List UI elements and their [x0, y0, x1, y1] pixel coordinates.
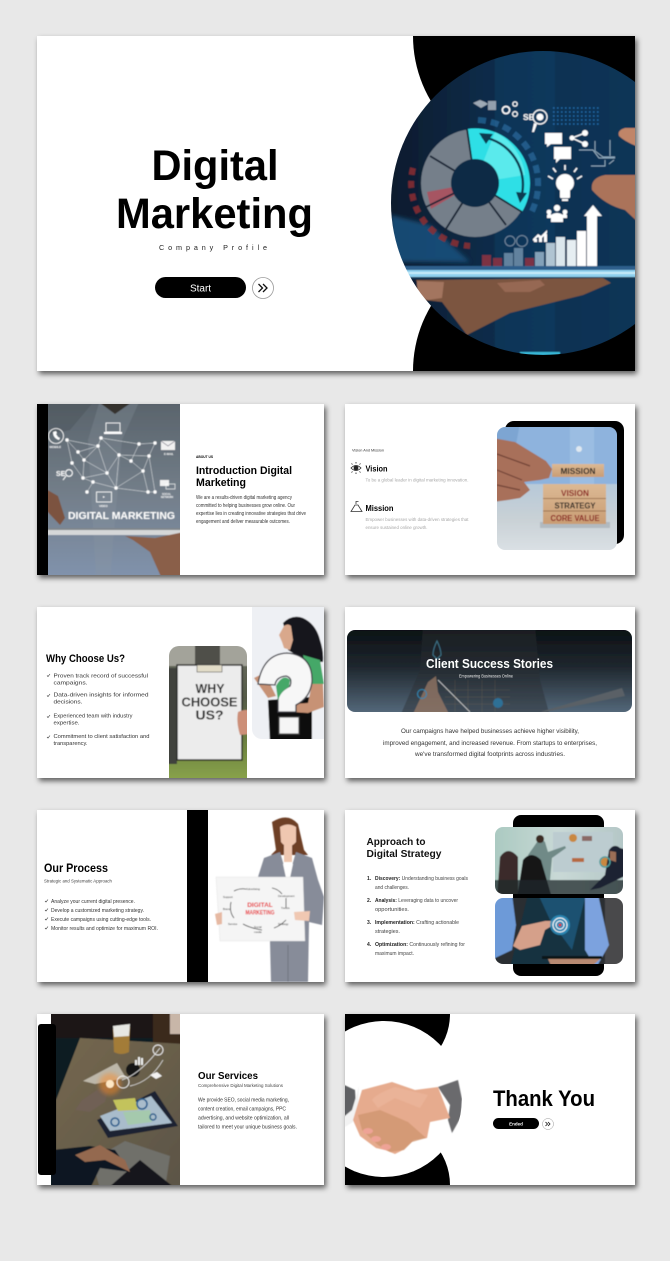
- heading: Digital Strategy: [366, 849, 442, 860]
- numbered list: opportunities.: [375, 907, 409, 913]
- checklist: Develop a customized marketing strategy.: [51, 908, 144, 914]
- checklist: Execute campaigns using cutting-edge tools.: [51, 917, 151, 923]
- body text: committed to helping businesses grow online. Our: [196, 503, 295, 509]
- photo: digital marketing network: NETWORK: [161, 496, 174, 499]
- heading: Marketing: [196, 477, 246, 489]
- numbered list: 3.: [367, 920, 372, 926]
- banner title: Client Success Stories: [426, 657, 553, 671]
- photo: wooden blocks: MISSION: [560, 467, 596, 476]
- panel: introduction slide: [37, 400, 324, 579]
- arrow button: [542, 1118, 554, 1130]
- photo: woman holding digital marketing board: Brand: [223, 907, 231, 911]
- checklist: campaigns.: [54, 680, 88, 686]
- banner image: [347, 630, 632, 712]
- numbered list: 1.: [367, 876, 372, 882]
- photo: handshake: [345, 1021, 462, 1177]
- body text: We are a results-driven digital marketing agency: [196, 495, 292, 501]
- vision heading: Vision: [366, 464, 388, 474]
- numbered list: Optimization: Continuously refining for: [375, 942, 465, 948]
- numbered list: Implementation: Crafting actionable: [375, 920, 459, 926]
- growth bars and arrow: [535, 205, 602, 266]
- checklist: Monitor results and optimize for maximum ROI.: [51, 926, 158, 932]
- black corner arcs: [345, 1014, 450, 1185]
- black backing shape: [513, 815, 604, 976]
- vision text: To be a global leader in digital marketing innovation.: [366, 478, 468, 482]
- photo: team presentation: [495, 827, 623, 894]
- checklist: Proven track record of successful: [54, 674, 148, 680]
- panel: hero slide: [35, 35, 641, 378]
- heading: [196, 465, 292, 489]
- photo: woman holding digital marketing board: DIGITAL: [247, 902, 273, 909]
- photo: why choose us clipboard: [169, 646, 247, 778]
- heading: Why Choose Us?: [46, 653, 125, 665]
- heading: Our Services: [198, 1070, 258, 1082]
- panel: vision and mission slide: [345, 404, 635, 575]
- label: vision and mission: Vision And Mission: [352, 448, 384, 452]
- arrow button: [252, 278, 274, 298]
- numbered list: [367, 876, 468, 957]
- photo: digital marketing network: SE: [56, 471, 66, 478]
- panel: our services slide: [37, 1010, 324, 1189]
- photo: digital marketing network: [44, 400, 184, 579]
- label: about us: ABOUT US: [196, 454, 213, 459]
- photo: woman holding digital marketing board: Trends: [281, 906, 290, 910]
- icon: mountain flag: [351, 502, 362, 512]
- panel: approach to digital strategy slide: [345, 810, 635, 982]
- panel: thank you slide: [343, 1013, 641, 1192]
- photo: woman holding digital marketing board: Support: [223, 895, 233, 899]
- photo: why choose us clipboard: US?: [196, 708, 224, 722]
- checklist: decisions.: [54, 700, 82, 706]
- photo: woman holding digital marketing board: media: [254, 930, 262, 934]
- heading: Thank You: [493, 1086, 595, 1111]
- photo: hand holding tablet with digital marketing icons: [385, 45, 641, 361]
- photo: why choose us clipboard: CHOOSE: [182, 696, 238, 710]
- start button: [155, 277, 246, 298]
- title: Digital: [152, 142, 278, 190]
- body text: advertising, and website optimization, all: [198, 1116, 289, 1122]
- body text: engagement and deliver measurable outcomes.: [196, 519, 290, 525]
- photo: wooden blocks: CORE VALUE: [550, 514, 600, 523]
- photo: woman holding digital marketing board: [215, 817, 324, 982]
- numbered list: and challenges.: [375, 885, 409, 891]
- mission text: [366, 517, 469, 530]
- heading: [366, 837, 442, 860]
- segmented ring: [478, 120, 538, 215]
- numbered list: 4.: [367, 942, 372, 948]
- banner subtitle: Empowering Businesses Online: [459, 674, 513, 678]
- photo: wooden blocks: STRATEGY: [554, 502, 596, 510]
- checklist: Data-driven insights for informed: [54, 692, 149, 698]
- dotted grid and circuit lines: [553, 108, 601, 124]
- body text: expertise lies in creating innovative strategies that drive: [196, 511, 306, 517]
- body text: Our campaigns have helped businesses achieve higher visibility,: [401, 729, 579, 735]
- photo: wooden blocks: [497, 427, 617, 550]
- body text: we've transformed digital footprints across industries.: [414, 752, 565, 758]
- photo: digital marketing network: MOBILE: [50, 445, 61, 449]
- numbered list: maximum impact.: [375, 951, 414, 957]
- photo: hands on phone with icons over desk: [51, 1014, 180, 1185]
- subheading: Comprehensive Digital Marketing Solutions: [198, 1083, 284, 1088]
- ended button: [493, 1118, 539, 1129]
- hand under tablet: [416, 278, 611, 335]
- heading: Our Process: [44, 863, 108, 875]
- checklist: Experienced team with industry: [54, 714, 133, 720]
- body text: improved engagement, and increased revenue. From startups to enterprises,: [383, 741, 597, 747]
- photo: digital marketing network: SOCIAL: [162, 493, 172, 496]
- black rounded strip: [38, 1024, 56, 1175]
- black bar: [187, 810, 208, 982]
- mission text: Empower businesses with data-driven strategies that: [366, 517, 469, 522]
- title: Marketing: [116, 190, 313, 238]
- body text: tailored to meet your unique business goals.: [198, 1124, 297, 1130]
- checklist: Commitment to client satisfaction and: [54, 734, 150, 740]
- photo: woman holding digital marketing board: Development: [278, 894, 295, 898]
- checklist: [47, 674, 150, 747]
- photo: why choose us clipboard: WHY: [196, 682, 225, 696]
- photo: digital marketing network: VIDEO: [99, 504, 109, 508]
- subheading: Strategic and Systematic Approach: [44, 878, 112, 884]
- checklist: transparency.: [54, 741, 88, 747]
- numbered list: Discovery: Understanding business goals: [375, 876, 468, 882]
- icon: eye: [351, 462, 361, 474]
- body text: We provide SEO, social media marketing,: [198, 1098, 289, 1104]
- photo: woman holding digital marketing board: Advertising: [246, 887, 260, 891]
- black strip: [37, 404, 48, 575]
- body text: [198, 1098, 297, 1130]
- photo: woman with question mark: [252, 607, 324, 739]
- black backing shape: [505, 421, 624, 544]
- icons: SEO, gears, chat, share, bulb, team: [473, 100, 588, 242]
- body text: [196, 495, 306, 525]
- numbered list: 2.: [367, 898, 372, 904]
- heading: Approach to: [366, 837, 426, 848]
- body text: content creation, email campaigns, PPC: [198, 1106, 286, 1112]
- panel: why choose us slide: [37, 603, 328, 782]
- tablet edge: [385, 266, 641, 270]
- mission text: ensure sustained online growth.: [366, 525, 428, 530]
- numbered list: Analysis: Leveraging data to uncover: [375, 898, 458, 904]
- checklist: [45, 899, 158, 932]
- heading: Introduction Digital: [196, 465, 292, 477]
- photo: digital marketing network: E-MAIL: [164, 452, 174, 456]
- panel: client success stories slide: [343, 607, 636, 778]
- body text: [383, 729, 597, 758]
- photo: digital marketing network: DIGITAL MARKETING: [68, 510, 175, 522]
- ended button: Ended: [509, 1122, 523, 1126]
- photo: wooden blocks: VISION: [561, 489, 589, 498]
- checklist: Analyze your current digital presence.: [51, 899, 135, 905]
- pie chart: [421, 129, 529, 237]
- photo: businessman touching target: [495, 898, 623, 964]
- photo: woman holding digital marketing board: Service: [228, 922, 238, 926]
- panel: our process slide: [37, 810, 324, 982]
- start button: Start: [190, 284, 211, 294]
- photo: woman holding digital marketing board: Strategy: [278, 922, 289, 926]
- photo: woman holding digital marketing board: Social: [254, 925, 262, 929]
- title: [116, 142, 313, 238]
- black corner arcs: [413, 36, 635, 371]
- icons: SEO, gears, chat, share, bulb, team: SE: [523, 112, 535, 122]
- right hand fingers: [618, 127, 635, 147]
- mission heading: Mission: [366, 504, 394, 513]
- subtitle: Company Profile: [159, 243, 267, 252]
- photo: woman holding digital marketing board: MARKETING: [246, 910, 274, 916]
- checklist: expertise.: [54, 720, 80, 726]
- numbered list: strategies.: [375, 929, 400, 935]
